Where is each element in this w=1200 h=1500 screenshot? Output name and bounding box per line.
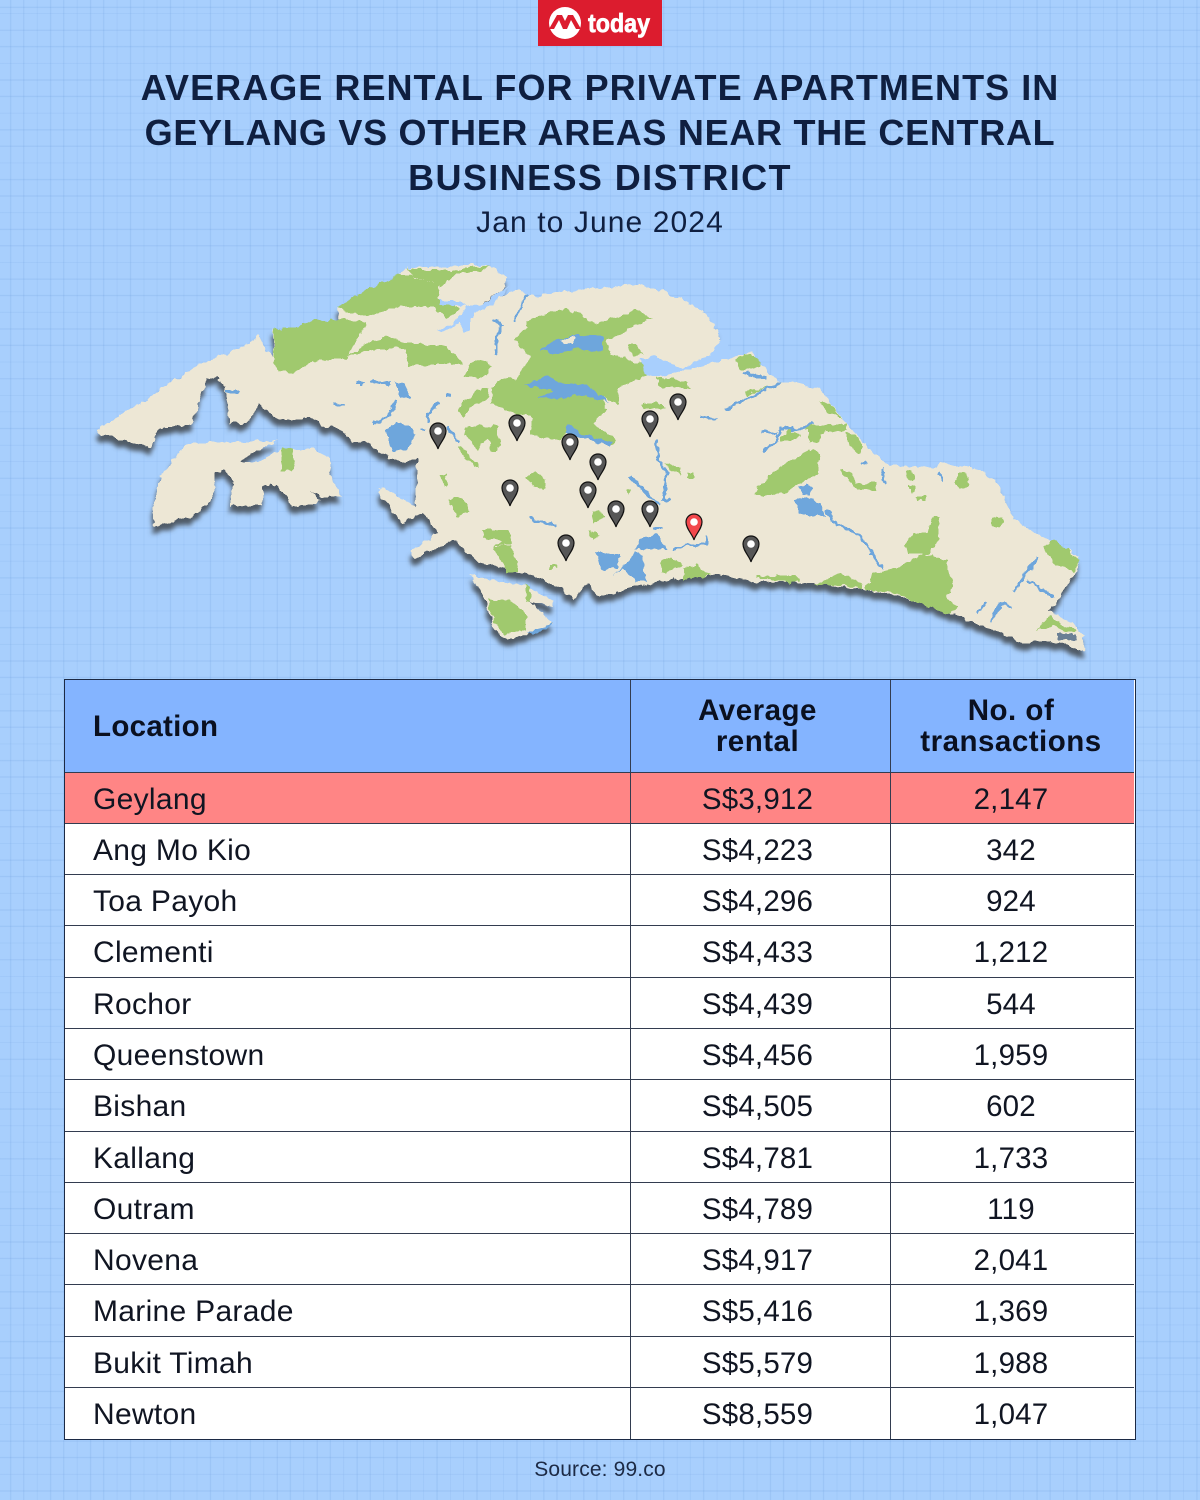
row: Queenstown: S$4,456 bbox=[702, 1038, 813, 1072]
row: Toa Payoh: Toa Payoh bbox=[93, 884, 237, 918]
row: Kallang bbox=[65, 1132, 1134, 1183]
row: Marine Parade bbox=[65, 1285, 1134, 1337]
row: Clementi bbox=[65, 926, 1134, 978]
row: Rochor: Rochor bbox=[93, 988, 192, 1020]
row: Toa Payoh: S$4,296 bbox=[702, 884, 813, 918]
row: Bishan bbox=[65, 1080, 1134, 1132]
row: Marine Parade: 1,369 bbox=[974, 1295, 1048, 1328]
row: Rochor: 544 bbox=[986, 988, 1036, 1020]
row: Toa Payoh bbox=[65, 875, 1134, 926]
logo: today bbox=[538, 0, 662, 46]
pin: Ang Mo Kio bbox=[670, 394, 686, 420]
central catchment and north bbox=[492, 308, 740, 446]
row: Clementi: S$4,433 bbox=[702, 936, 813, 969]
row: Geylang: Geylang bbox=[93, 782, 207, 816]
table header: Location bbox=[93, 710, 218, 742]
pin: Queenstown bbox=[502, 480, 518, 506]
pin: Bishan bbox=[642, 411, 658, 437]
row: Queenstown: Queenstown bbox=[93, 1038, 264, 1072]
row: Kallang: Kallang bbox=[93, 1142, 195, 1174]
title: GEYLANG VS OTHER AREAS NEAR THE CENTRAL bbox=[145, 112, 1055, 153]
row: Queenstown: 1,959 bbox=[974, 1038, 1048, 1072]
pin: Bukit Timah bbox=[509, 415, 525, 441]
row: Ang Mo Kio bbox=[65, 824, 1134, 875]
row: Outram bbox=[65, 1183, 1134, 1234]
data table bbox=[64, 679, 1136, 1440]
row: Bishan: S$4,505 bbox=[702, 1090, 813, 1123]
row: Clementi: Clementi bbox=[93, 936, 214, 969]
pin: Newton bbox=[608, 501, 624, 527]
map detail: parks and water bbox=[227, 265, 1080, 640]
row: Marine Parade: Marine Parade bbox=[93, 1295, 294, 1328]
row: Kallang: S$4,781 bbox=[702, 1142, 813, 1174]
row: Rochor bbox=[65, 978, 1134, 1029]
table header: No. of bbox=[968, 694, 1054, 727]
row: Bishan: Bishan bbox=[93, 1090, 187, 1123]
pin: Geylang bbox=[686, 514, 702, 540]
row: Novena: Novena bbox=[93, 1244, 198, 1276]
row: Queenstown bbox=[65, 1029, 1134, 1080]
title: BUSINESS DISTRICT bbox=[408, 157, 792, 198]
row: Newton: S$8,559 bbox=[702, 1398, 813, 1430]
table header: rental bbox=[716, 725, 799, 758]
row: Bukit Timah: 1,988 bbox=[974, 1346, 1048, 1380]
row: Rochor: S$4,439 bbox=[702, 988, 813, 1020]
row: Outram: 119 bbox=[987, 1192, 1035, 1226]
row: Geylang bbox=[65, 773, 1134, 824]
row: Novena: S$4,917 bbox=[702, 1244, 813, 1276]
row: Marine Parade: S$5,416 bbox=[702, 1295, 813, 1328]
row: Newton bbox=[93, 1388, 1048, 1439]
row: Newton: Newton bbox=[93, 1398, 197, 1431]
row: Bishan: 602 bbox=[986, 1090, 1036, 1123]
table header: Average bbox=[698, 694, 817, 727]
row: Geylang: S$3,912 bbox=[702, 782, 813, 816]
pin: Novena bbox=[580, 482, 596, 508]
source note: Source: 99.co bbox=[534, 1458, 666, 1481]
logo: today: today bbox=[588, 8, 650, 38]
subtitle: Jan to June 2024 bbox=[476, 206, 724, 239]
table header: transactions bbox=[920, 725, 1102, 758]
row: Ang Mo Kio: S$4,223 bbox=[702, 834, 813, 866]
row: Bukit Timah: Bukit Timah bbox=[93, 1346, 253, 1380]
row: Novena: 2,041 bbox=[974, 1244, 1048, 1276]
pin: Marine Parade bbox=[743, 536, 759, 562]
pin: Clementi bbox=[430, 423, 446, 449]
row: Ang Mo Kio: 342 bbox=[986, 834, 1036, 866]
title: AVERAGE RENTAL FOR PRIVATE APARTMENTS IN bbox=[141, 67, 1059, 108]
row: Outram: Outram bbox=[93, 1192, 195, 1226]
row: Bukit Timah bbox=[65, 1337, 1134, 1388]
landmass bbox=[95, 265, 1085, 652]
row: Geylang: 2,147 bbox=[974, 782, 1048, 816]
row: Bukit Timah: S$5,579 bbox=[702, 1346, 813, 1380]
parks and water, centre bbox=[528, 440, 710, 582]
parks and water, east bbox=[642, 354, 1080, 640]
row: Newton: 1,047 bbox=[974, 1398, 1048, 1430]
row: Ang Mo Kio: Ang Mo Kio bbox=[93, 834, 251, 866]
pin: Kallang bbox=[642, 501, 658, 527]
row: Toa Payoh: 924 bbox=[986, 884, 1036, 918]
row: Novena bbox=[65, 1234, 1134, 1285]
pin: Toa Payoh bbox=[590, 454, 606, 480]
parks and water, west bbox=[227, 265, 553, 635]
row: Outram: S$4,789 bbox=[702, 1192, 813, 1226]
row: Clementi: 1,212 bbox=[974, 936, 1048, 969]
map of Singapore bbox=[94, 263, 1087, 661]
table header bbox=[65, 680, 1134, 773]
pin: Outram bbox=[558, 535, 574, 561]
title bbox=[141, 67, 1059, 198]
row: Kallang: 1,733 bbox=[974, 1142, 1048, 1174]
pin: Bishan west bbox=[562, 434, 578, 460]
